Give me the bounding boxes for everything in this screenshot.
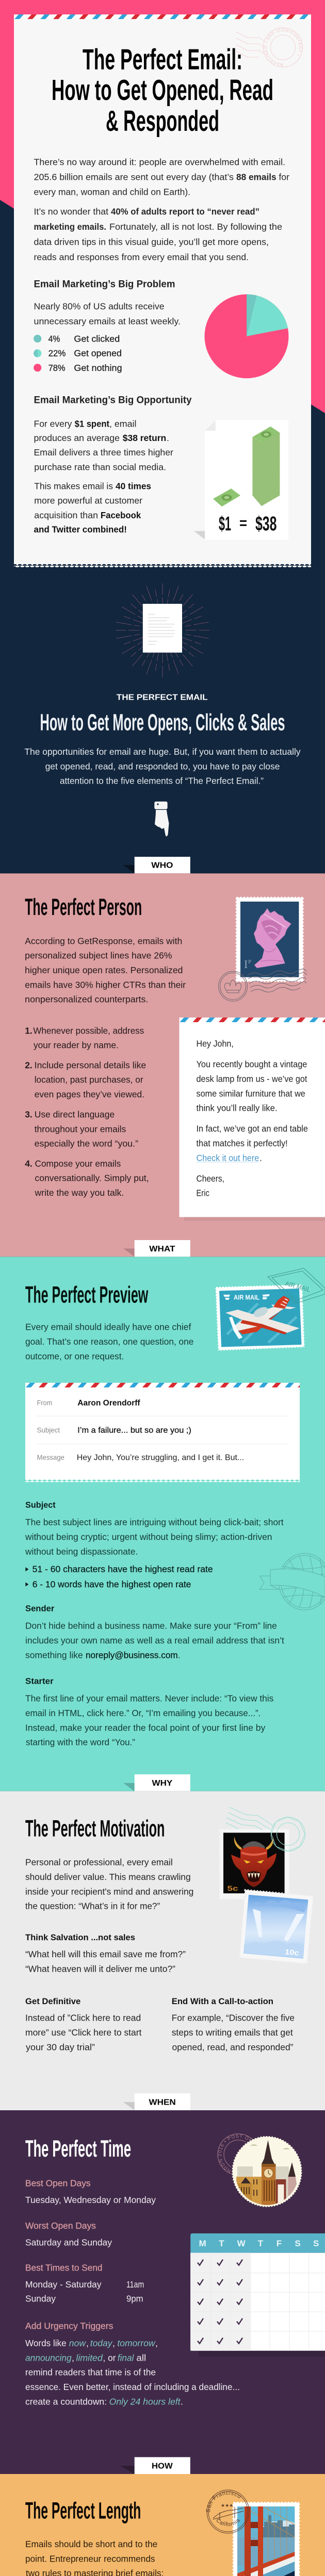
numbered tips: throughout your emails (35, 1124, 126, 1134)
add urgency triggers: , (86, 2338, 89, 2348)
intro text: There’s no way around it: people are overwhelmed with email. (34, 157, 285, 167)
opportunity text: $38 return (123, 433, 166, 443)
money equation (219, 513, 277, 535)
opportunity text: . (167, 433, 169, 443)
sender guidance: includes your own name as well as a real email address that isn’t (25, 1635, 284, 1646)
paragraph (25, 1857, 193, 1911)
intro text: Fortunately, all is not lost. By following the (109, 222, 282, 232)
best times to send: 9pm (126, 2293, 143, 2303)
best times to send (25, 2262, 144, 2303)
numbered tips: 1. (25, 1025, 32, 1036)
paragraph: nonpersonalized counterparts. (25, 994, 148, 1005)
intro text: reads and responses from every email that you send. (34, 252, 249, 262)
sender guidance: . (178, 1650, 181, 1660)
paragraph: inside your recipient's mind and answering (25, 1886, 193, 1896)
opportunity text: Facebook (101, 510, 141, 520)
opportunity text: For every (34, 418, 72, 429)
paragraph: Emails should be short and to the (25, 2539, 157, 2549)
legend: 4% (48, 333, 60, 344)
calendar (190, 2233, 325, 2357)
heading: The Perfect Length (25, 2497, 141, 2523)
tab: what (123, 1240, 190, 1257)
paragraph (25, 2539, 164, 2576)
get definitive (25, 1996, 142, 2052)
legend: Get nothing (74, 363, 122, 373)
opportunity text: acquisition than (34, 510, 98, 520)
icon: air mail postmark (268, 1268, 325, 1303)
heading: big opportunity: Email Marketing’s Big Opportunity (34, 395, 192, 406)
numbered tips: 3. (25, 1109, 32, 1120)
weekday labels (199, 2239, 319, 2248)
problem text (34, 301, 181, 326)
tab: when: WHEN (149, 2098, 176, 2107)
intro text: for (279, 172, 289, 182)
icon: london postmark: LONDON 2016 • POST OFFICE • (218, 2134, 252, 2174)
tab: when (123, 2093, 190, 2110)
add urgency triggers: create a countdown: (25, 2396, 107, 2406)
panel: the perfect preview (0, 1257, 325, 1791)
tab: why (123, 1774, 190, 1791)
sender guidance: Sender (25, 1604, 55, 1614)
opportunity text: produces an average (34, 433, 120, 443)
think salvation (25, 1933, 186, 1974)
opportunity text: and Twitter combined! (34, 524, 127, 534)
get definitive: Get Definitive (25, 1996, 80, 2006)
icon: postmark: BACKLINKO • AND ICONICONTENT • (264, 29, 302, 66)
airmail stripe (25, 1383, 300, 1387)
add urgency triggers: today (90, 2338, 113, 2348)
sender guidance: noreply@business.com (86, 1650, 178, 1660)
add urgency triggers: , (155, 2338, 158, 2348)
opportunity text: purchase rate than social media. (34, 462, 166, 472)
weekday labels: W (237, 2239, 246, 2248)
tab: how: HOW (152, 2462, 173, 2470)
tab: why: WHY (152, 1779, 173, 1788)
best open days: Best Open Days (25, 2178, 91, 2188)
stamp label (223, 1294, 270, 1301)
starter guidance: email in HTML, click here.” Or, “I’m emailing you because...”. (25, 1708, 261, 1718)
money equation: $38 (255, 513, 277, 535)
weekday labels: F (277, 2239, 282, 2248)
numbered tips: Whenever possible, address (33, 1025, 144, 1036)
icon: queen stamp: P (248, 959, 251, 965)
best open days (25, 2178, 156, 2205)
intro text: It’s no wonder that (34, 207, 108, 217)
icon: sunburst document (116, 583, 209, 677)
think salvation: “What hell will this email save me from?” (25, 1949, 186, 1959)
paragraph: personalized subject lines have 26% (25, 951, 172, 961)
legend: 22% (48, 348, 66, 359)
add urgency triggers: Only 24 hours left (109, 2396, 181, 2406)
add urgency triggers (25, 2321, 240, 2406)
icon: queen stamp: I (244, 958, 248, 971)
add urgency triggers: , (112, 2338, 115, 2348)
worst open days: Saturday and Sunday (25, 2238, 112, 2248)
subject guidance (25, 1500, 284, 1589)
paragraph: goal. That’s one reason, one question, one (25, 1336, 193, 1347)
letter text: Cheers, (196, 1173, 224, 1183)
icon: san francisco postmark: California (217, 2518, 240, 2527)
tab: what: WHAT (149, 1245, 175, 1253)
get definitive: more” use “Click here to start (25, 2027, 142, 2038)
best times to send: Monday - Saturday (25, 2279, 102, 2290)
row: from: From (37, 1398, 52, 1406)
numbered tips: even pages they’ve viewed. (35, 1089, 144, 1099)
panel: sample letter (180, 1018, 325, 1221)
opportunity text: This makes email is (34, 481, 113, 491)
panel: the perfect person (0, 873, 325, 1257)
tab: who: WHO (151, 861, 173, 870)
row: message: Hey John, You’re struggling, and I get it. But... (77, 1453, 244, 1462)
section paragraph: The opportunities for email are huge. But, if you want them to actually (24, 747, 301, 757)
weekday labels: T (219, 2239, 224, 2248)
icon: teal postmark (226, 1807, 305, 1851)
subject guidance: 51 - 60 characters have the highest read rate (32, 1564, 213, 1574)
icon: big ben stamp (232, 2136, 302, 2208)
end with a call-to-action: End With a Call-to-action (172, 1996, 273, 2006)
icon: devil stamp: 5c (227, 1884, 238, 1892)
opportunity text: Email delivers a three times higher (34, 447, 173, 457)
section paragraph (24, 747, 301, 786)
add urgency triggers: remind readers that time is of the (25, 2367, 156, 2378)
airmail stripe (14, 14, 311, 19)
check marks (198, 2260, 242, 2344)
end with a call-to-action (172, 1996, 295, 2052)
paragraph (25, 1322, 193, 1361)
letter text: Eric (196, 1188, 209, 1198)
numbered tips: Include personal details like (35, 1060, 146, 1070)
icon: air mail stamp (216, 1284, 305, 1351)
add urgency triggers: now (69, 2338, 86, 2348)
paragraph: should deliver value. This means crawling (25, 1872, 191, 1882)
subject guidance: Subject (25, 1500, 56, 1510)
paragraph: Every email should ideally have one chief (25, 1322, 191, 1332)
icon: san francisco postmark: ★★★ (221, 2503, 233, 2508)
legend: Get clicked (74, 333, 120, 344)
paragraph: Personal or professional, every email (25, 1857, 173, 1868)
worst open days (25, 2221, 112, 2248)
end with a call-to-action: For example, “Discover the five (172, 2013, 295, 2023)
best open days: Tuesday, Wednesday or Monday (25, 2195, 156, 2205)
letter text: You recently bought a vintage (196, 1059, 307, 1070)
sender guidance: something like (25, 1650, 83, 1660)
money equation: $1 (219, 513, 231, 535)
starter guidance: The first line of your email matters. Never include: “To view this (25, 1693, 274, 1704)
letter text: some similar furniture that we (196, 1088, 305, 1098)
subject guidance: The best subject lines are intriguing without being click-bait; short (25, 1517, 284, 1528)
section paragraph: attention to the five elements of “The Perfect Email.” (60, 776, 264, 786)
starter guidance: starting with the word “You.” (26, 1737, 135, 1748)
problem text: unnecessary emails at least weekly. (34, 316, 181, 326)
letter text: Check it out here (196, 1153, 259, 1163)
panel: the perfect time (0, 2110, 325, 2474)
legend: 78% (48, 363, 66, 373)
best times to send: Sunday (25, 2293, 56, 2303)
letter text: Hey John, (196, 1039, 234, 1049)
add urgency triggers: Add Urgency Triggers (25, 2321, 113, 2331)
think salvation: “What heaven will it deliver me unto?” (25, 1963, 175, 1974)
opportunity text: , email (109, 418, 136, 429)
numbered tips: Use direct language (35, 1109, 115, 1120)
airmail stripe (180, 1018, 325, 1022)
row: message: Message (37, 1453, 64, 1461)
end with a call-to-action: steps to writing emails that get (172, 2027, 293, 2038)
get definitive: Instead of ”Click here to read (25, 2013, 141, 2023)
paragraph: higher unique open rates. Personalized (25, 965, 183, 975)
letter text: think you’ll really like. (196, 1103, 278, 1113)
think salvation: Think Salvation ...not sales (25, 1933, 135, 1942)
icon: single bill (213, 488, 240, 506)
tab: how (120, 2457, 190, 2474)
subject guidance: 6 - 10 words have the highest open rate (32, 1579, 191, 1589)
paragraph: the question: “What’s in it for me?” (25, 1901, 160, 1911)
row: subject: Subject (37, 1426, 60, 1434)
add urgency triggers: tomorrow (117, 2338, 156, 2348)
numbered tips: especially the word “you.” (35, 1139, 138, 1149)
add urgency triggers: announcing (25, 2352, 72, 2363)
numbered tips (25, 1025, 149, 1198)
letter text: . (259, 1153, 262, 1163)
icon: bill stack (252, 427, 280, 506)
panel: the perfect length (0, 2474, 325, 2576)
add urgency triggers: , (72, 2352, 74, 2363)
icon: globe watermark (260, 1553, 325, 1610)
paragraph (25, 936, 186, 1005)
numbered tips: location, past purchases, or (35, 1074, 143, 1084)
add urgency triggers: , or (103, 2352, 116, 2363)
best times to send: 11am (126, 2279, 144, 2290)
numbered tips: your reader by name. (34, 1040, 119, 1050)
starter guidance: Starter (25, 1676, 54, 1686)
paragraph: According to GetResponse, emails with (25, 936, 182, 946)
icon: postmark (236, 28, 303, 67)
paragraph: outcome, or one request. (25, 1351, 124, 1361)
plane (225, 1296, 300, 1339)
subject guidance: without being dispassionate. (25, 1546, 138, 1556)
numbered tips: 2. (25, 1060, 32, 1070)
title: & Responded (106, 105, 219, 138)
heading: The Perfect Time (25, 2136, 131, 2162)
paragraph: emails have 30% higher CTRs than their (25, 979, 186, 990)
panel: email preview (25, 1383, 300, 1482)
icon: heaven stamp (239, 1890, 314, 1964)
sender guidance: Don’t hide behind a business name. Make sure your “From” line (25, 1621, 277, 1631)
letter text: that matches it perfectly! (196, 1138, 288, 1148)
worst open days: Worst Open Days (25, 2221, 96, 2231)
icon: pointing hand (154, 802, 169, 837)
opportunity text: 40 times (116, 481, 151, 491)
money illustration note (194, 420, 288, 540)
icon: golden gate stamp (233, 2502, 300, 2576)
end with a call-to-action: opened, read, and responded” (172, 2042, 294, 2052)
best times to send: Best Times to Send (25, 2262, 102, 2273)
icon: air mail postmark: AIR MAIL (284, 1279, 311, 1294)
heading: The Perfect Motivation (25, 1815, 165, 1841)
intro text: every man, woman and child on Earth). (34, 187, 190, 197)
letter text: In fact, we’ve got an end table (196, 1124, 308, 1134)
intro text: data driven tips in this visual guide, you’ll get more opens, (34, 236, 269, 247)
heading: The Perfect Person (25, 894, 142, 920)
starter guidance: Instead, make your reader the focal point of your first line by (25, 1722, 266, 1733)
weekday labels: T (258, 2239, 264, 2248)
intro text: 205.6 billion emails are sent out every day (that’s (34, 172, 234, 182)
section kicker: THE PERFECT EMAIL (117, 693, 208, 702)
heading: big problem: Email Marketing’s Big Problem (34, 279, 175, 290)
weekday labels: S (313, 2239, 319, 2248)
row: from: Aaron Orendorff (77, 1399, 140, 1408)
numbered tips: write the way you talk. (34, 1188, 124, 1198)
icon: queen stamp (236, 897, 304, 982)
legend (34, 333, 122, 373)
numbered tips: conversationally. Simply put, (35, 1173, 149, 1183)
paragraph: point. Entrepreneur recommends (25, 2553, 155, 2564)
weekday labels: M (199, 2239, 206, 2248)
opportunity text: more powerful at customer (34, 495, 142, 505)
add urgency triggers: Words like (25, 2338, 67, 2348)
add urgency triggers: essence. Even better, instead of including a deadline... (25, 2382, 240, 2392)
intro text (34, 157, 289, 262)
opportunity text: $1 spent (75, 418, 109, 429)
add urgency triggers: . (181, 2396, 183, 2406)
icon: crown postmark (219, 969, 307, 1001)
icon: devil stamp (219, 1829, 289, 1900)
row: from (37, 1398, 140, 1408)
add urgency triggers: final (118, 2352, 135, 2363)
opportunity text (34, 418, 173, 534)
weekday labels: S (295, 2239, 301, 2248)
sender guidance (25, 1604, 284, 1660)
get definitive: your 30 day trial” (26, 2042, 95, 2052)
letter text (196, 1039, 308, 1198)
numbered tips: 4. (25, 1159, 32, 1169)
icon: heaven stamp: 10c (285, 1947, 299, 1957)
legend: Get opened (74, 348, 122, 359)
icon: san francisco postmark: San Francisco (206, 2490, 240, 2512)
letter text: desk lamp from us - we’ve got (196, 1074, 307, 1084)
title (52, 43, 273, 138)
add urgency triggers: limited (76, 2352, 103, 2363)
subject guidance: without being cryptic; urgent without being slimy; action-driven (25, 1532, 272, 1542)
money equation: = (239, 515, 247, 532)
section paragraph: get opened, read, and responded to, you have to pay close (45, 761, 280, 771)
intro text: 40% of adults report to “never read” (111, 207, 259, 217)
starter guidance (25, 1676, 274, 1748)
stamp label: AIR MAIL (234, 1294, 259, 1301)
numbered tips: Compose your emails (35, 1159, 121, 1169)
add urgency triggers: all (136, 2352, 146, 2363)
intro text: marketing emails. (34, 222, 106, 232)
intro text: 88 emails (236, 172, 277, 182)
pie chart (204, 294, 289, 378)
row: subject: I’m a failure... but so are you ;) (77, 1426, 191, 1435)
tab: who (123, 857, 190, 873)
panel: the perfect motivation (0, 1791, 325, 2110)
panel: intro envelope section (0, 0, 325, 874)
heading: The Perfect Preview (25, 1281, 149, 1308)
icon: san francisco postmark (206, 2489, 250, 2534)
panel: letter card (14, 14, 311, 567)
problem text: Nearly 80% of US adults receive (34, 301, 164, 312)
